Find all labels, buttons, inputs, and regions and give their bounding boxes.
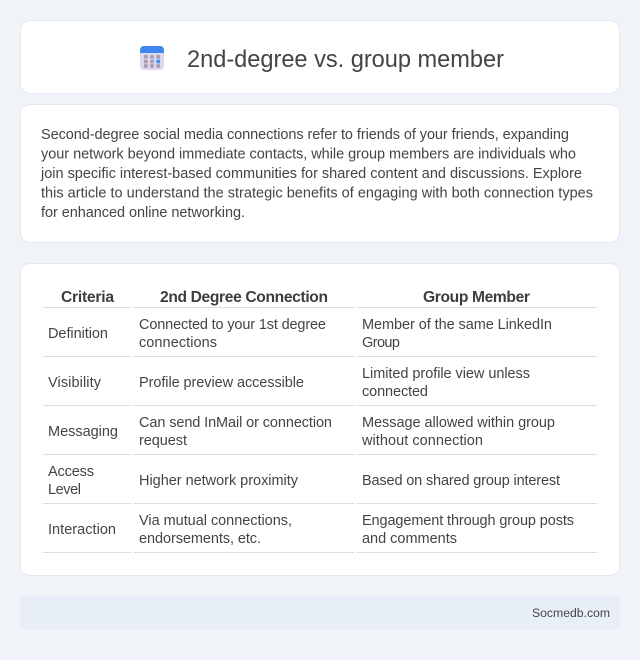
title: 2nd-degree vs. group member xyxy=(187,47,504,73)
row: definition: connections xyxy=(139,335,217,351)
row: access level: Based on shared group interest xyxy=(362,473,560,489)
footer source text: Socmedb.com xyxy=(532,606,610,620)
row: access level xyxy=(43,464,597,504)
table header row: 2nd Degree Connection xyxy=(160,289,328,306)
row: interaction xyxy=(43,513,597,553)
row: interaction: Via mutual connections, xyxy=(139,513,292,529)
row: definition: Definition xyxy=(48,326,108,342)
row: visibility xyxy=(43,366,597,406)
row: messaging xyxy=(43,415,597,455)
row: messaging: Can send InMail or connection xyxy=(139,415,332,431)
table header row: Group Member xyxy=(423,289,530,306)
row: messaging: without connection xyxy=(361,433,483,449)
row: access level: Level xyxy=(48,482,81,498)
footer bar xyxy=(20,596,620,630)
row: access level: Access xyxy=(48,464,94,480)
panel: comparison table xyxy=(20,264,620,576)
intro paragraph: for enhanced online networking. xyxy=(41,205,245,221)
row: messaging: request xyxy=(139,433,187,449)
panel: introduction xyxy=(20,104,620,242)
row: visibility: Visibility xyxy=(48,375,102,391)
row: messaging: Message allowed within group xyxy=(362,415,555,431)
row: definition: Member of the same LinkedIn xyxy=(362,317,552,333)
row: visibility: Profile preview accessible xyxy=(139,375,304,391)
row: interaction: endorsements, etc. xyxy=(139,531,261,547)
row: messaging: Messaging xyxy=(48,424,118,440)
row: interaction: Engagement through group posts xyxy=(362,513,574,529)
row: interaction: and comments xyxy=(362,531,457,547)
intro paragraph xyxy=(40,127,593,221)
table header row: Criteria xyxy=(61,289,114,306)
row: interaction: Interaction xyxy=(48,522,116,538)
row: definition: Group xyxy=(362,335,400,351)
intro paragraph: join specific interest-based communities for shared content and discussions. Explore xyxy=(40,166,582,182)
row: definition xyxy=(43,317,597,357)
table header row xyxy=(43,289,597,308)
row: access level: Higher network proximity xyxy=(139,473,299,489)
icon: calendar xyxy=(140,46,164,70)
row: definition: Connected to your 1st degree xyxy=(139,317,326,333)
intro paragraph: this article to understand the strategic benefits of engaging with both connection types xyxy=(41,186,593,202)
intro paragraph: Second-degree social media connections refer to friends of your friends, expanding xyxy=(41,127,569,143)
row: visibility: Limited profile view unless xyxy=(362,366,530,382)
row: visibility: connected xyxy=(362,384,428,400)
intro paragraph: your network beyond immediate contacts, while group members are individuals who xyxy=(41,146,576,162)
panel: title header xyxy=(20,20,620,94)
